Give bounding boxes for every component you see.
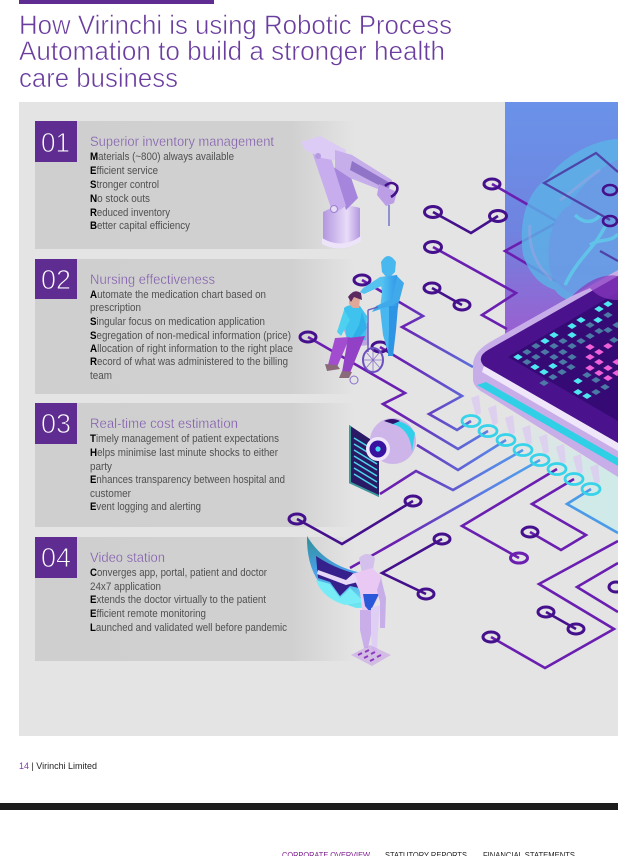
icon: nurse robot with wheelchair patient xyxy=(325,256,404,384)
panel: card 04 video station: Launched and validated well before pandemic xyxy=(90,622,287,634)
panel: card 01 inventory: 01 xyxy=(41,127,70,158)
icon: robotic arm xyxy=(301,136,397,248)
panel: card 03 cost estimation: Enhances transparency between hospital and xyxy=(90,474,285,486)
panel: card 03 cost estimation: Helps minimise last minute shocks to either xyxy=(90,447,278,459)
blue sky background xyxy=(505,102,618,334)
panel: card 03 cost estimation: 03 xyxy=(41,408,71,439)
panel: card 02 nursing: Record of what was administered to the billing xyxy=(90,356,288,368)
panel: card 02 nursing: Allocation of right information to the right place xyxy=(90,343,293,355)
panel: card 03 cost estimation: customer xyxy=(90,488,131,500)
chip pixel grid: pink xyxy=(586,344,618,380)
title: How Virinchi is using Robotic Process xyxy=(19,10,452,40)
panel: card 01 inventory: Materials (~800) always available xyxy=(90,151,234,163)
panel: card 02 nursing: Singular focus on medication application xyxy=(90,316,265,328)
icon: doctor robot with curved video screen xyxy=(307,536,391,666)
panel: card 01 inventory: Better capital efficiency xyxy=(90,220,190,232)
panel: card 02 nursing: Nursing effectiveness xyxy=(90,272,215,287)
icon: eye camera with data panel xyxy=(349,418,416,497)
title: Automation to build a stronger health xyxy=(19,36,445,66)
panel: card 04 video station: Converges app, portal, patient and doctor xyxy=(90,567,267,579)
panel: card 04 video station xyxy=(35,537,355,661)
chip pixel grid: cyan xyxy=(514,302,612,398)
page footer: 14 | Virinchi Limited xyxy=(19,761,97,771)
panel: card 04 video station: 04 xyxy=(41,542,71,573)
panel: card 03 cost estimation: Timely management of patient expectations xyxy=(90,433,279,445)
top accent bar xyxy=(19,0,214,4)
page separator bar xyxy=(0,803,618,810)
panel: card 03 cost estimation: Real-time cost estimation xyxy=(90,416,238,431)
panel: card 02 nursing: Automate the medication chart based on xyxy=(90,289,266,301)
panel: card 02 nursing xyxy=(35,259,355,394)
illustration: holographic brain xyxy=(522,139,618,307)
panel: card 04 video station: 24x7 application xyxy=(90,581,161,593)
illustration: processor chip xyxy=(471,270,618,485)
panel: card 04 video station: Extends the doctor virtually to the patient xyxy=(90,594,266,606)
chip pins xyxy=(471,395,600,485)
chip connector rings xyxy=(462,416,600,494)
panel: card 04 video station: Video station xyxy=(90,550,165,565)
title xyxy=(19,10,452,93)
panel: background xyxy=(19,102,618,736)
circuit traces xyxy=(297,184,618,668)
panel: card 01 inventory: Superior inventory management xyxy=(90,134,274,149)
circuit nodes xyxy=(289,179,618,642)
panel: card 01 inventory: Reduced inventory xyxy=(90,207,170,219)
panel: card 02 nursing: 02 xyxy=(41,264,71,295)
panel: card 04 video station: Efficient remote monitoring xyxy=(90,608,206,620)
panel: card 01 inventory: Stronger control xyxy=(90,179,159,191)
panel: card 02 nursing: team xyxy=(90,370,112,382)
panel: card 01 inventory: No stock outs xyxy=(90,193,150,205)
title: care business xyxy=(19,63,178,93)
panel: card 02 nursing: prescription xyxy=(90,302,141,314)
panel: card 01 inventory xyxy=(35,121,355,249)
panel: card 03 cost estimation: Event logging and alerting xyxy=(90,501,201,513)
next page header navigation xyxy=(282,851,575,856)
teal glow under chip pins xyxy=(478,395,618,533)
panel: card 03 cost estimation xyxy=(35,403,355,527)
chip pixel grid: steel xyxy=(523,312,618,394)
panel: card 01 inventory: Efficient service xyxy=(90,165,158,177)
panel: card 03 cost estimation: party xyxy=(90,461,112,473)
panel: card 02 nursing: Segregation of non-medical information (price) xyxy=(90,330,291,342)
